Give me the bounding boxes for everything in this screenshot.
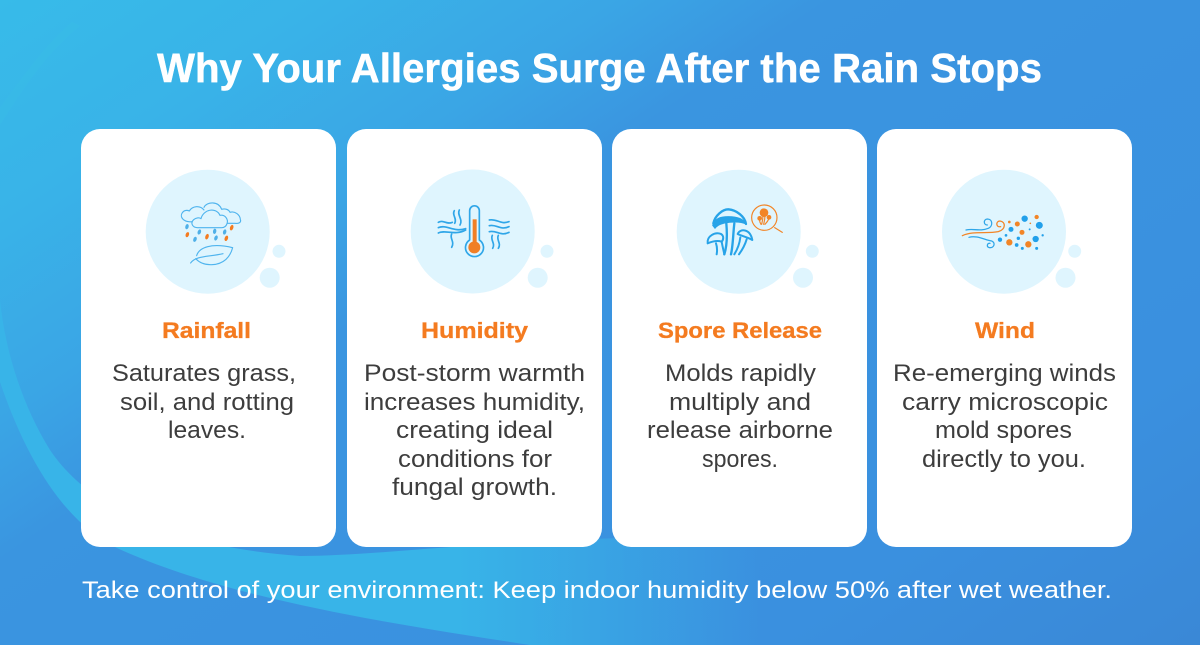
text: humidity description bbox=[364, 360, 585, 501]
footer callout: Take control of your environment: Keep indoor humidity below 50% after wet weather. bbox=[82, 577, 1112, 604]
text: rainfall description: leaves. bbox=[168, 417, 246, 444]
text: wind description bbox=[893, 360, 1116, 473]
panel: spore release bbox=[612, 129, 867, 547]
text: humidity description: conditions for bbox=[398, 446, 552, 473]
panel: rainfall bbox=[81, 129, 336, 547]
title: Why Your Allergies Surge After the Rain Stops bbox=[157, 45, 1042, 91]
text: rainfall description bbox=[112, 360, 296, 444]
text: spore release description: multiply and bbox=[669, 389, 811, 416]
text: wind description: Re-emerging winds bbox=[893, 360, 1116, 387]
heading: humidity: Humidity bbox=[421, 318, 529, 343]
panel: wind bbox=[877, 129, 1132, 547]
text: spore release description: release airborne bbox=[647, 417, 833, 444]
icon: mushrooms and magnifier bbox=[677, 170, 819, 294]
icon: rain cloud and leaf bbox=[146, 170, 286, 294]
text: spore release description: spores. bbox=[702, 446, 778, 473]
text: humidity description: fungal growth. bbox=[392, 474, 557, 501]
text: spore release description: Molds rapidly bbox=[665, 360, 816, 387]
text: humidity description: Post-storm warmth bbox=[364, 360, 585, 387]
text: wind description: carry microscopic bbox=[902, 389, 1108, 416]
heading: wind: Wind bbox=[975, 318, 1035, 343]
text: rainfall description: Saturates grass, bbox=[112, 360, 296, 387]
text: wind description: mold spores bbox=[935, 417, 1072, 444]
panel: humidity bbox=[347, 129, 602, 547]
text: rainfall description: soil, and rotting bbox=[120, 389, 294, 416]
heading: spore release: Spore Release bbox=[658, 318, 822, 343]
text: humidity description: creating ideal bbox=[396, 417, 553, 444]
text: humidity description: increases humidity, bbox=[364, 389, 585, 416]
icon: thermometer and heat waves bbox=[411, 170, 554, 294]
heading: rainfall: Rainfall bbox=[162, 318, 251, 343]
text: spore release description bbox=[647, 360, 833, 473]
text: wind description: directly to you. bbox=[922, 446, 1086, 473]
icon: wind and spores bbox=[942, 170, 1081, 294]
